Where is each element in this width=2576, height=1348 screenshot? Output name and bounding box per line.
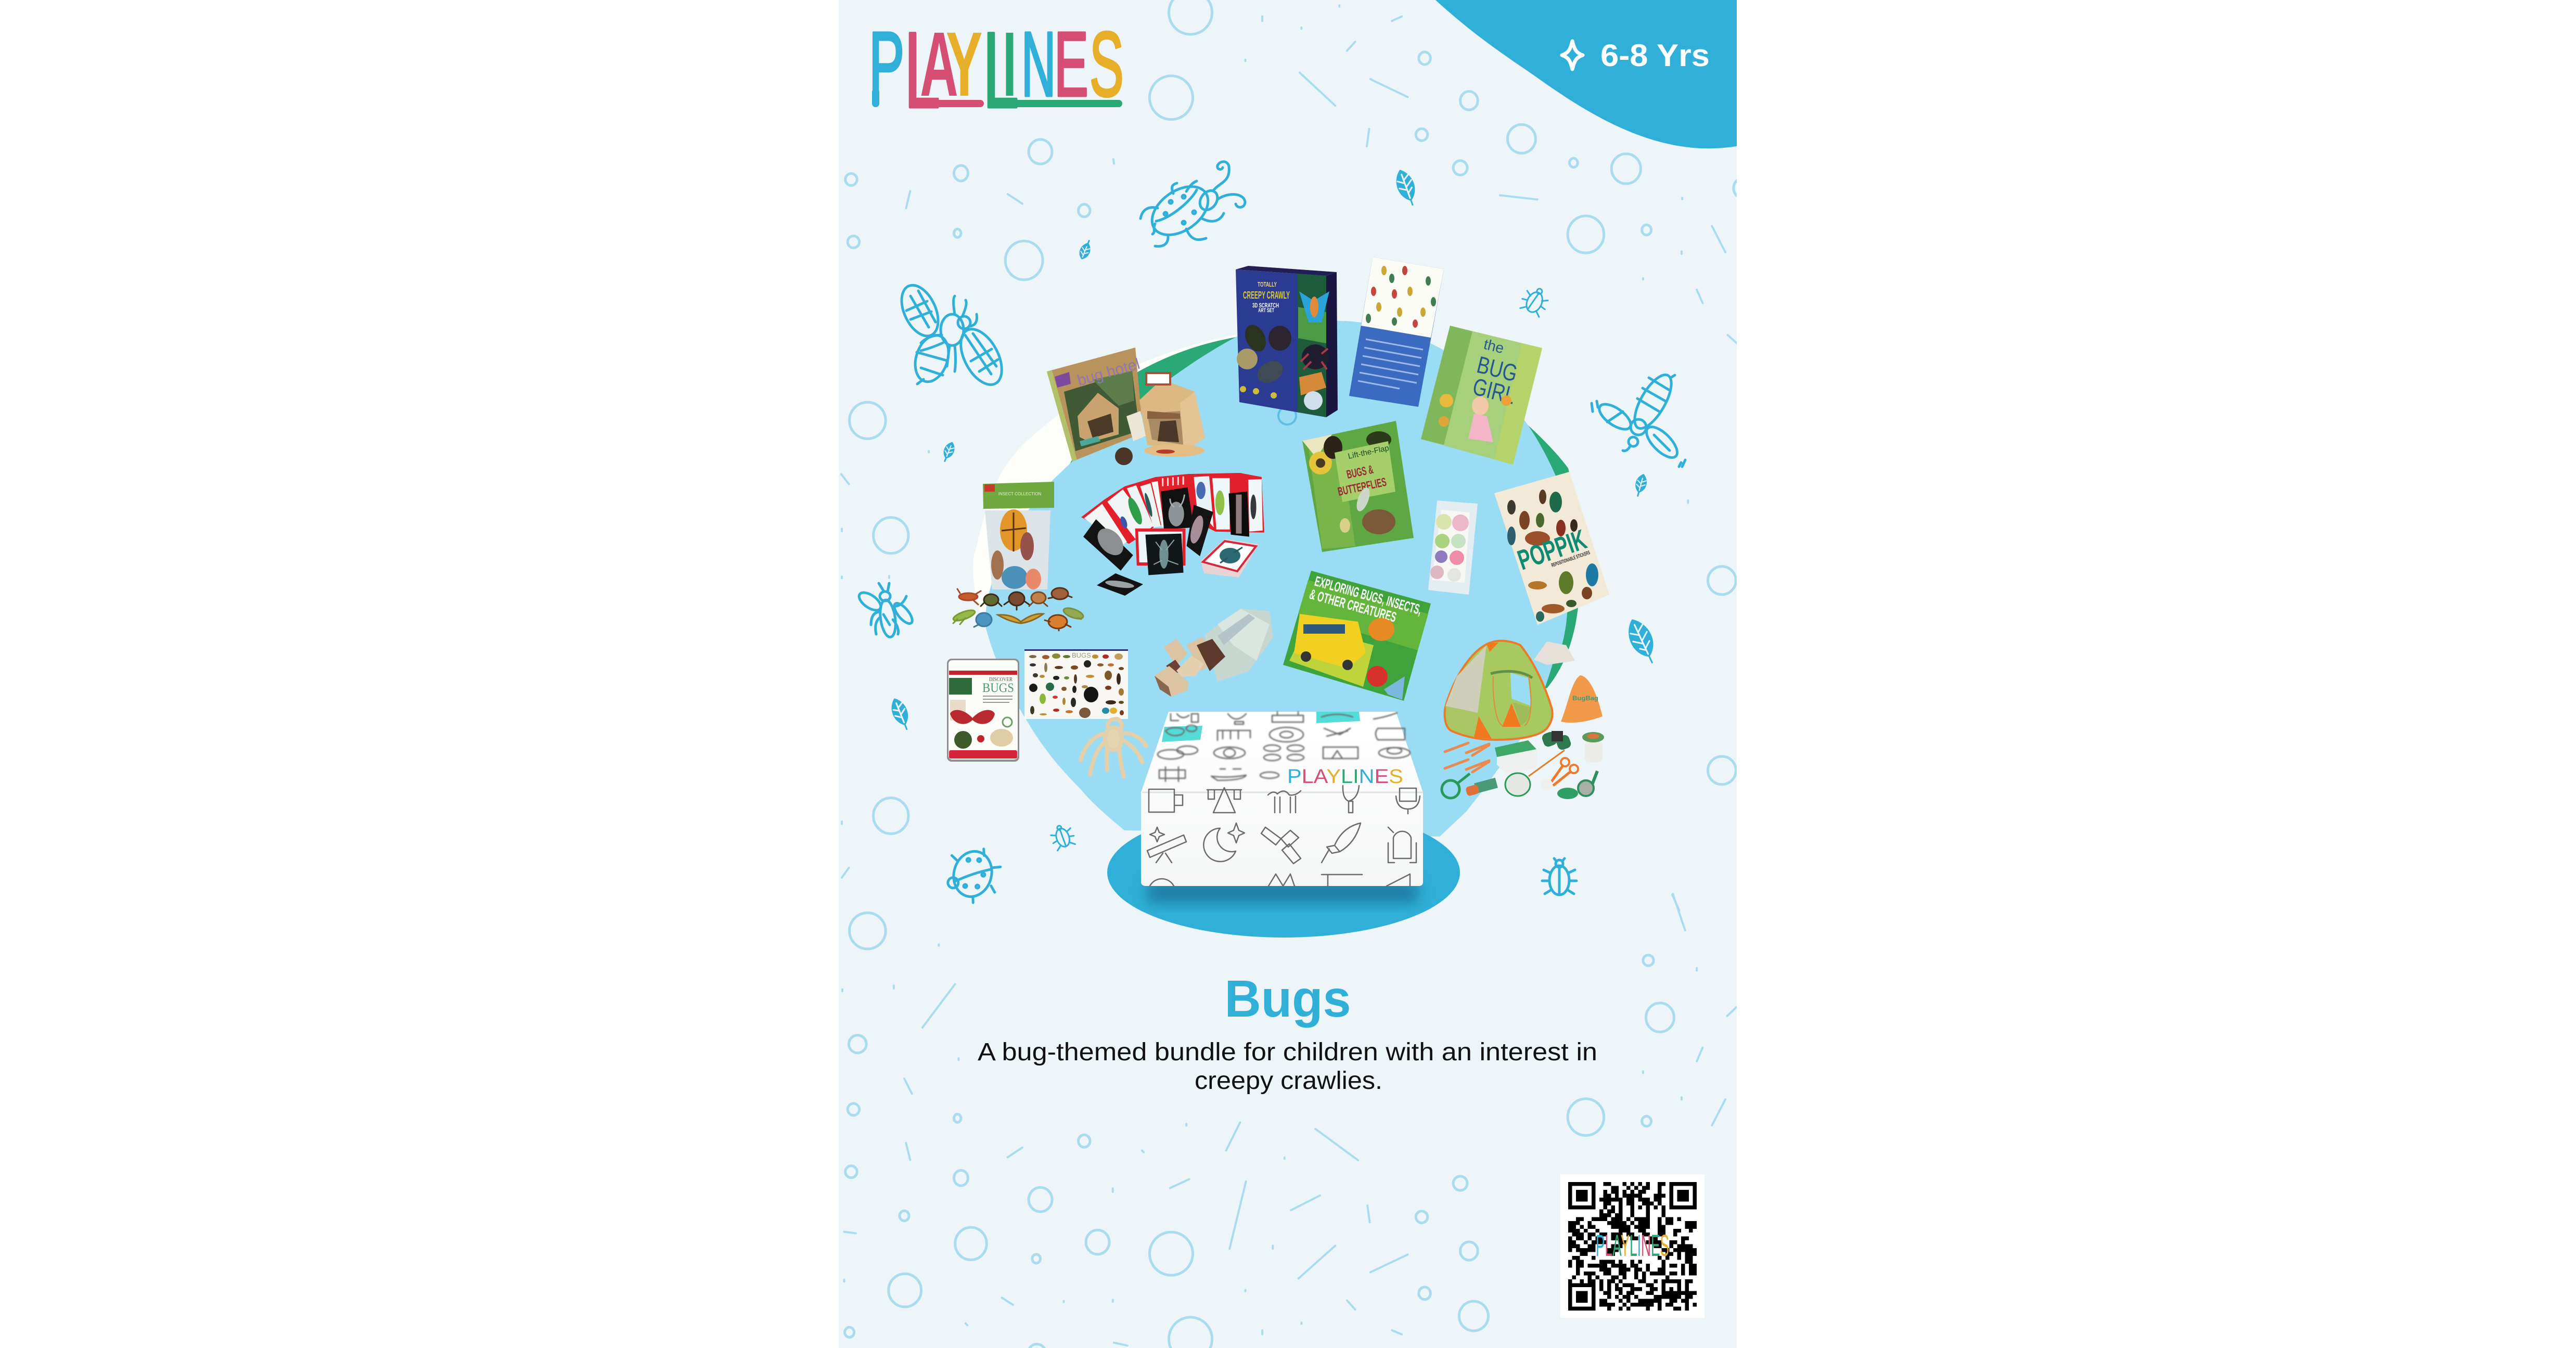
logo: Playlines: E <box>1054 14 1088 115</box>
box platform ellipse <box>1107 807 1460 938</box>
icon: leaf top <box>1393 168 1420 208</box>
product: The Bug Girl book: BUG <box>1475 351 1520 387</box>
product: bug catcher tent <box>1445 641 1553 740</box>
icon: camel <box>1268 791 1301 813</box>
logo: Playlines: P <box>869 14 904 115</box>
icon: small beetle lower left <box>1048 822 1076 851</box>
product: lift the flap bugs and butterflies book <box>1302 421 1414 552</box>
product: bug hotel kit <box>1047 348 1205 465</box>
logo: Playlines <box>869 10 1124 131</box>
logo: Playlines: N <box>1021 13 1056 115</box>
logo on box: PLAYLINES <box>1287 766 1403 788</box>
icon: rocket <box>1322 823 1361 863</box>
product: The Bug Girl book: GIRL <box>1470 373 1518 409</box>
product: Exploring Bugs book: EXPLORING BUGS, INSECTS, <box>1313 573 1424 618</box>
product: Exploring Bugs book: & OTHER CREATURES <box>1308 586 1398 625</box>
illustration backdrop: green crescent <box>1066 324 1581 688</box>
icon: mosquito <box>856 583 915 638</box>
icon: small leaf 1 <box>1078 239 1093 260</box>
product: creepy crawly scratch art box <box>1236 266 1338 417</box>
product: flower sticker sheet <box>1428 500 1478 595</box>
product: Poppik sticker poster: POPPIK <box>1514 524 1591 576</box>
description: creepy crawlies. <box>1195 1067 1382 1095</box>
product: loose black bug card <box>1097 573 1143 596</box>
icon: leaf left <box>889 697 913 731</box>
icon: sparkle <box>1562 41 1583 69</box>
QR code <box>1560 1174 1704 1318</box>
title: Bugs <box>1225 970 1351 1028</box>
logo: Playlines: I <box>1003 13 1017 115</box>
icon: wasp <box>1592 369 1685 467</box>
logo: Playlines: S <box>1090 14 1124 115</box>
product: Poppik sticker poster: REPOSITIONABLE STICKERS <box>1550 550 1591 569</box>
gift box <box>1141 712 1423 903</box>
product: bug hotel kit: bug hotel <box>1075 355 1142 390</box>
product: Poppik sticker poster <box>1494 472 1609 625</box>
product: Discover Bugs tin: BUGS <box>982 681 1014 695</box>
faint bubble on the circle <box>1278 407 1296 425</box>
description: A bug-themed bundle for children with an interest in <box>978 1038 1597 1066</box>
icon: small beetle top right <box>1518 284 1552 318</box>
icon: ladybug lower left <box>941 841 1005 907</box>
teal icon patches <box>1162 726 1202 742</box>
icon: microphone <box>1396 788 1420 814</box>
icon: ferris wheel <box>1207 788 1241 813</box>
product: bugs poster: BUGS <box>1072 651 1091 659</box>
product: beetle pattern card <box>1349 257 1444 407</box>
icon: moon and star <box>1203 823 1245 862</box>
background pattern: bubbles and dashes <box>841 0 1748 1348</box>
QR logo: PLAYLINES <box>1596 1229 1669 1263</box>
logo: Playlines: L <box>904 10 940 131</box>
product: Discover Bugs tin <box>947 659 1019 762</box>
illustration backdrop: white crescent <box>973 335 1249 628</box>
product: creepy crawly scratch art box: CREEPY CRAWLY <box>1243 290 1290 301</box>
product: wooden stamps set <box>1155 609 1273 697</box>
product: explorer kit tools <box>1442 730 1604 799</box>
icon: leaf large right <box>1623 616 1661 667</box>
icon: satellite <box>1261 827 1301 864</box>
product: orange drawstring bag: BugBag <box>1572 695 1598 702</box>
illustration backdrop: light blue circle <box>985 320 1569 837</box>
product: explorer hat <box>1534 641 1575 665</box>
icon: small leaf 2 <box>941 441 956 463</box>
logo: Playlines: L <box>983 10 1019 131</box>
product: bug flash cards <box>1081 473 1264 575</box>
icon: telescope <box>1147 827 1186 863</box>
icon: beetle lower right <box>1542 858 1577 895</box>
product: lift the flap bugs and butterflies book: Lift-the-Flap <box>1347 444 1390 461</box>
product: The Bug Girl book <box>1421 326 1542 465</box>
icon: bee <box>894 279 1010 391</box>
box body <box>1141 712 1423 886</box>
lid icons <box>1158 712 1410 781</box>
product: insect model bag <box>952 482 1085 631</box>
product: card deck tin <box>1201 539 1259 577</box>
product: The Bug Girl book: the <box>1482 336 1506 356</box>
description <box>978 1038 1597 1095</box>
product: creepy crawly scratch art box: 3D SCRATCH <box>1252 302 1279 309</box>
poster background <box>839 0 1737 1348</box>
product: creepy crawly scratch art box: TOTALLY <box>1258 280 1277 288</box>
product: Discover Bugs tin: DISCOVER <box>989 676 1013 683</box>
icon: droid robot <box>1388 827 1416 863</box>
icon: small leaf 3 <box>1633 473 1648 497</box>
product: lift the flap bugs and butterflies book: BUTTERFLIES <box>1337 475 1388 498</box>
product: lift the flap bugs and butterflies book: BUGS & <box>1345 463 1375 481</box>
product: Exploring Bugs book <box>1283 571 1431 701</box>
icon: partial bottom row <box>1150 874 1410 886</box>
product: orange drawstring bag <box>1561 675 1603 723</box>
icon: ladybug top <box>1140 162 1245 246</box>
icon: mug <box>1149 789 1183 812</box>
logo: Playlines: A <box>920 14 958 115</box>
front panel icons <box>1147 786 1420 886</box>
icon: paddle <box>1343 786 1359 813</box>
logo: Playlines: Y <box>946 13 982 115</box>
box shadow <box>1147 882 1418 903</box>
product: creepy crawly scratch art box: ART SET <box>1258 307 1274 314</box>
product: insect model bag: INSECT COLLECTION <box>998 492 1041 496</box>
product: wooden spider model <box>1081 719 1146 777</box>
product: bugs poster <box>1024 649 1128 719</box>
age label: 6-8 Yrs <box>1600 38 1710 73</box>
corner age badge <box>1436 0 1737 148</box>
